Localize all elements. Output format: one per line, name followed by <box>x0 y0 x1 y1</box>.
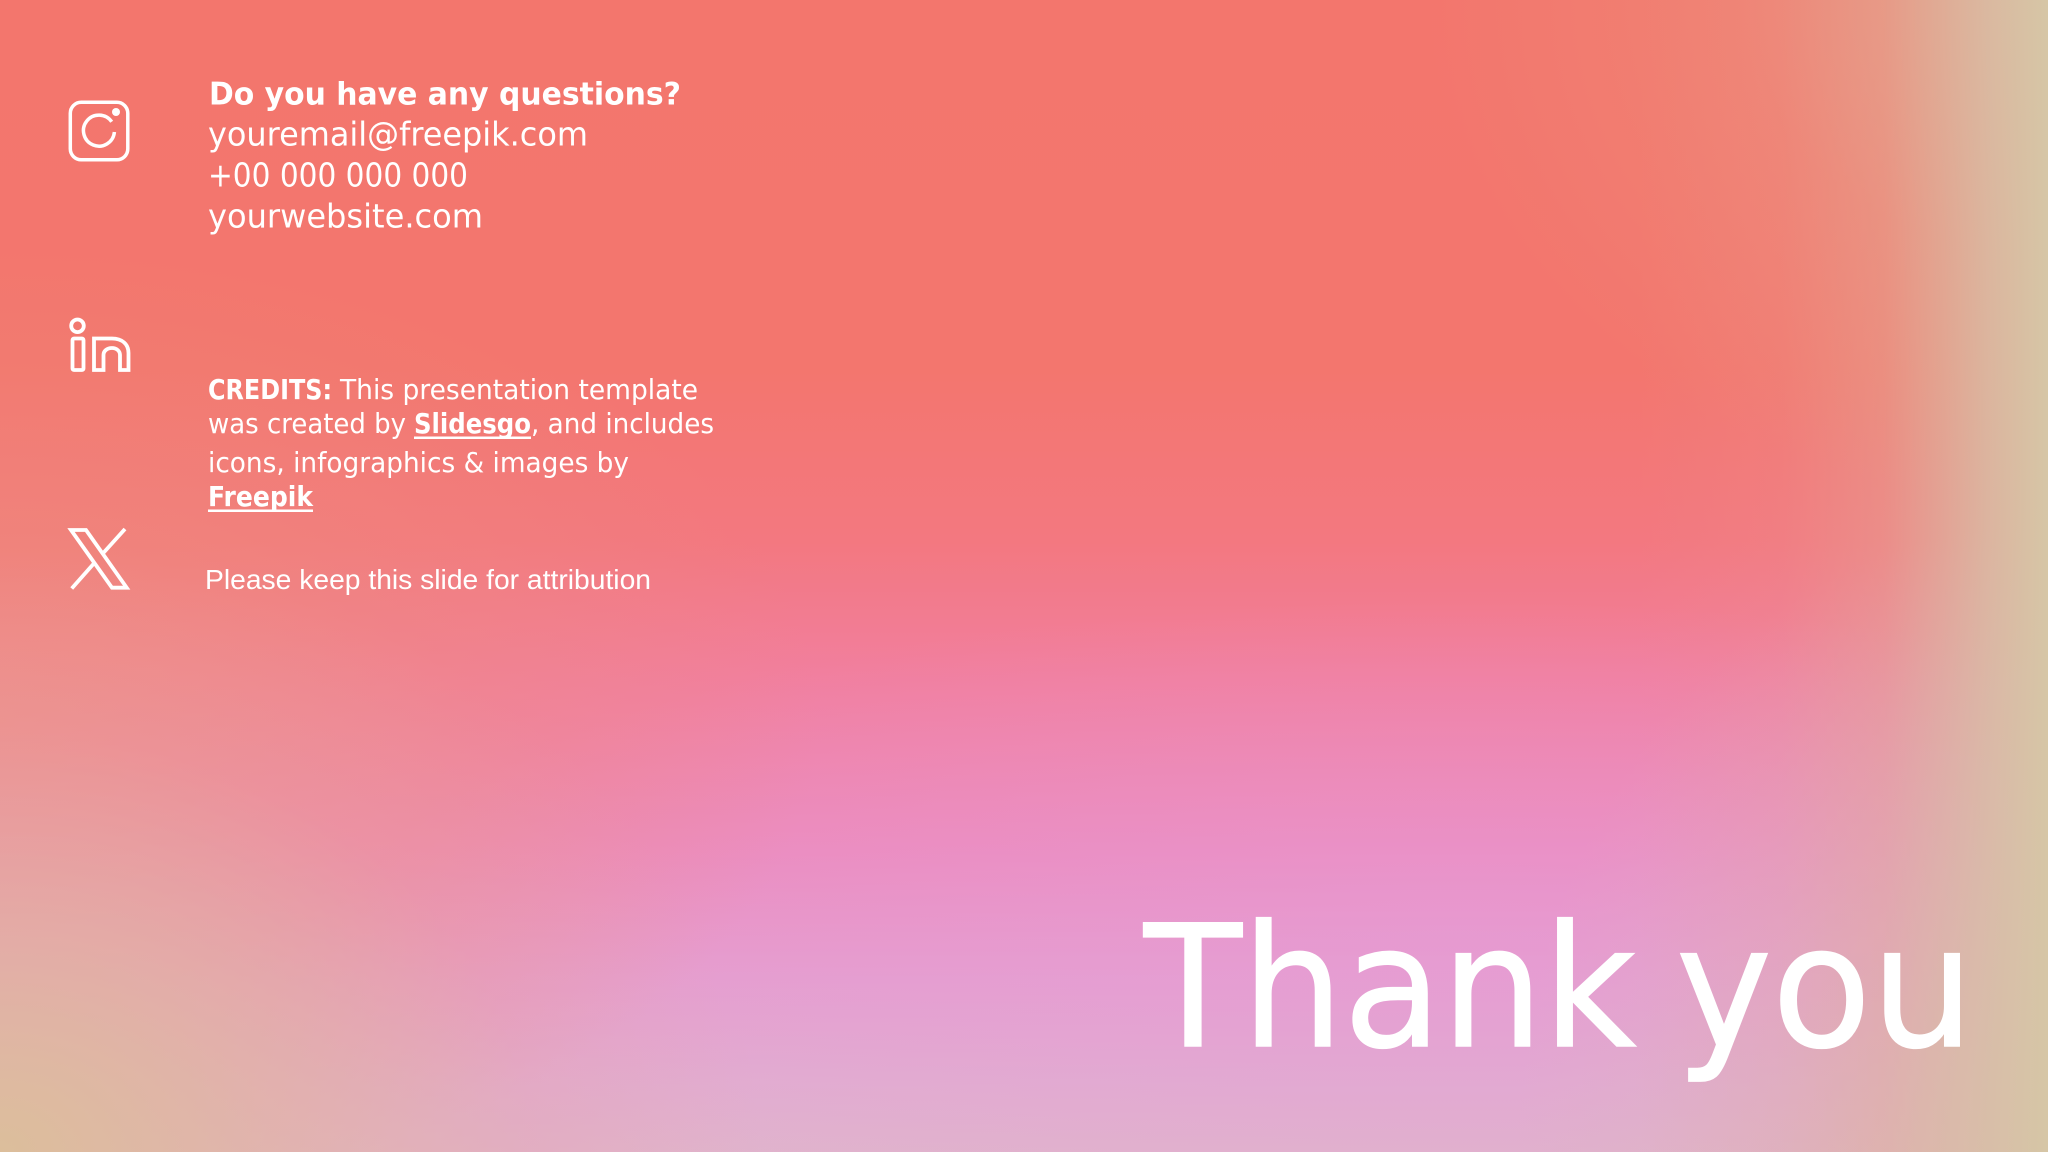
credits text: This presentation template <box>339 374 698 406</box>
icon: linkedin <box>71 320 128 370</box>
title: thank you: you <box>1676 889 1974 1086</box>
credits text: CREDITS: <box>208 374 332 406</box>
credits text: Slidesgo <box>414 408 531 440</box>
contact heading: Do you have any questions? <box>209 76 681 112</box>
contact details: youremail@freepik.com <box>208 116 588 154</box>
credits text: was created by <box>208 408 406 440</box>
icon: x <box>71 529 127 588</box>
icon: instagram <box>70 102 128 160</box>
credits text <box>208 374 714 513</box>
credits text: , and includes <box>531 408 714 440</box>
contact details: yourwebsite.com <box>208 198 483 236</box>
contact details <box>208 116 588 236</box>
attribution note: Please keep this slide for attribution <box>205 564 651 595</box>
contact details: +00 000 000 000 <box>208 156 468 194</box>
title: thank you <box>1143 889 1974 1086</box>
title: thank you: Thank <box>1143 889 1636 1086</box>
credits text: icons, infographics & images by <box>208 447 629 479</box>
credits text: Freepik <box>208 481 314 513</box>
